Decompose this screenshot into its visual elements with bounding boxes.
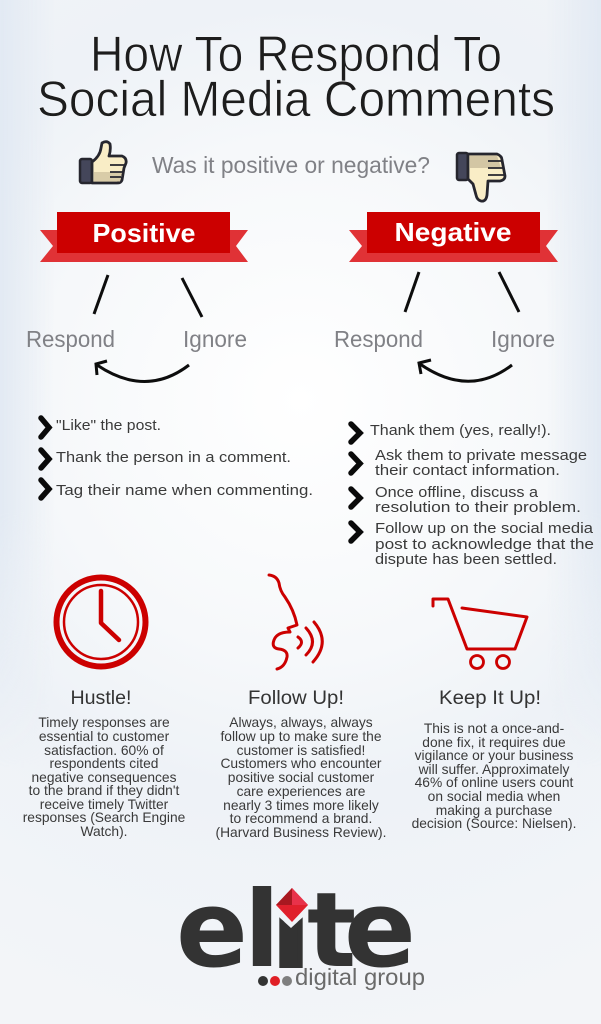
column: follow up: nearly 3 times more likely bbox=[223, 798, 379, 813]
icon: thumbs down bbox=[457, 153, 505, 201]
column: keep it up: This is not a once-and- bbox=[424, 721, 564, 736]
positive decision diagram: Ignore bbox=[183, 326, 247, 352]
logo dots bbox=[258, 976, 292, 986]
negative action list: dispute has been settled. bbox=[375, 551, 557, 568]
panel: negative ribbon: Negative bbox=[394, 217, 512, 247]
title bbox=[37, 26, 555, 127]
icon: clock bbox=[56, 578, 146, 666]
column: keep it up: making a purchase bbox=[436, 803, 553, 818]
logo: elite digital group: i bbox=[273, 869, 309, 991]
icon: thumbs up bbox=[80, 142, 126, 183]
column: follow up: care experiences are bbox=[237, 784, 366, 799]
panel: negative ribbon bbox=[349, 212, 558, 262]
icon: red diamond bbox=[276, 888, 308, 922]
column: follow up: positive social customer bbox=[228, 770, 375, 785]
icon: face speaking bbox=[269, 575, 322, 669]
negative decision diagram bbox=[334, 272, 555, 381]
positive action list: "Like" the post. bbox=[56, 417, 161, 434]
column: keep it up: on social media when bbox=[428, 789, 560, 804]
logo: elite digital group: e bbox=[344, 868, 416, 991]
logo: elite digital group: e bbox=[176, 868, 248, 991]
column: hustle: Hustle! bbox=[70, 688, 132, 709]
column: keep it up: decision (Source: Nielsen). bbox=[412, 816, 576, 831]
negative action list: Once offline, discuss a bbox=[375, 484, 539, 501]
column: keep it up: 46% of online users count bbox=[415, 775, 574, 790]
column: hustle: respondents cited bbox=[50, 756, 158, 771]
column: hustle: receive timely Twitter bbox=[40, 797, 169, 812]
title: Social Media Comments bbox=[37, 71, 555, 127]
negative decision diagram: Ignore bbox=[491, 326, 555, 352]
logo: elite digital group: l bbox=[244, 869, 280, 991]
negative action list: Ask them to private message bbox=[375, 447, 587, 464]
column: hustle: essential to customer bbox=[39, 729, 170, 744]
negative action list: Thank them (yes, really!). bbox=[370, 422, 551, 439]
logo: elite digital group: digital group bbox=[295, 964, 425, 990]
negative decision diagram: Respond bbox=[334, 326, 423, 352]
positive action list: Tag their name when commenting. bbox=[56, 482, 313, 499]
arrow: ignore to respond bbox=[96, 361, 189, 382]
panel: positive ribbon: Positive bbox=[92, 218, 196, 248]
column: follow up: follow up to make sure the bbox=[220, 729, 382, 744]
positive decision diagram: Respond bbox=[26, 326, 115, 352]
column: hustle: Timely responses are bbox=[38, 715, 170, 730]
title: How To Respond To bbox=[90, 26, 502, 82]
column: hustle: responses (Search Engine bbox=[23, 810, 186, 825]
negative action list: post to acknowledge that the bbox=[375, 536, 594, 553]
column: keep it up: vigilance or your business bbox=[415, 748, 573, 763]
positive action list bbox=[41, 417, 313, 499]
column: hustle: negative consequences bbox=[32, 770, 177, 785]
column: keep it up: Keep It Up! bbox=[439, 688, 541, 709]
column: follow up: customer is satisfied! bbox=[237, 743, 365, 758]
column: follow up: (Harvard Business Review). bbox=[216, 825, 386, 840]
column: keep it up: done fix, it requires due bbox=[422, 735, 566, 750]
positive decision diagram bbox=[26, 275, 247, 382]
negative action list bbox=[351, 422, 594, 568]
negative action list: resolution to their problem. bbox=[375, 499, 581, 516]
negative action list: Follow up on the social media bbox=[375, 520, 594, 537]
arrow: ignore to respond bbox=[419, 360, 512, 381]
subtitle question: Was it positive or negative? bbox=[152, 152, 430, 178]
column: follow up: to recommend a brand. bbox=[230, 811, 372, 826]
column: hustle: to the brand if they didn't bbox=[29, 783, 179, 798]
icon: shopping cart bbox=[433, 599, 527, 668]
column: keep it up bbox=[412, 688, 576, 831]
column: hustle: Watch). bbox=[80, 824, 128, 839]
column: hustle: satisfaction. 60% of bbox=[44, 743, 164, 758]
column: follow up: Follow Up! bbox=[248, 688, 344, 709]
column: follow up: Customers who encounter bbox=[220, 756, 382, 771]
positive action list: Thank the person in a comment. bbox=[56, 449, 291, 466]
column: hustle bbox=[23, 688, 186, 839]
logo: elite digital group bbox=[180, 886, 424, 990]
column: follow up: Always, always, always bbox=[229, 715, 373, 730]
logo: elite digital group: t bbox=[307, 871, 356, 991]
column: keep it up: will suffer. Approximately bbox=[418, 762, 570, 777]
column: follow up bbox=[216, 688, 386, 840]
panel: positive ribbon bbox=[40, 212, 248, 262]
negative action list: their contact information. bbox=[375, 462, 560, 479]
